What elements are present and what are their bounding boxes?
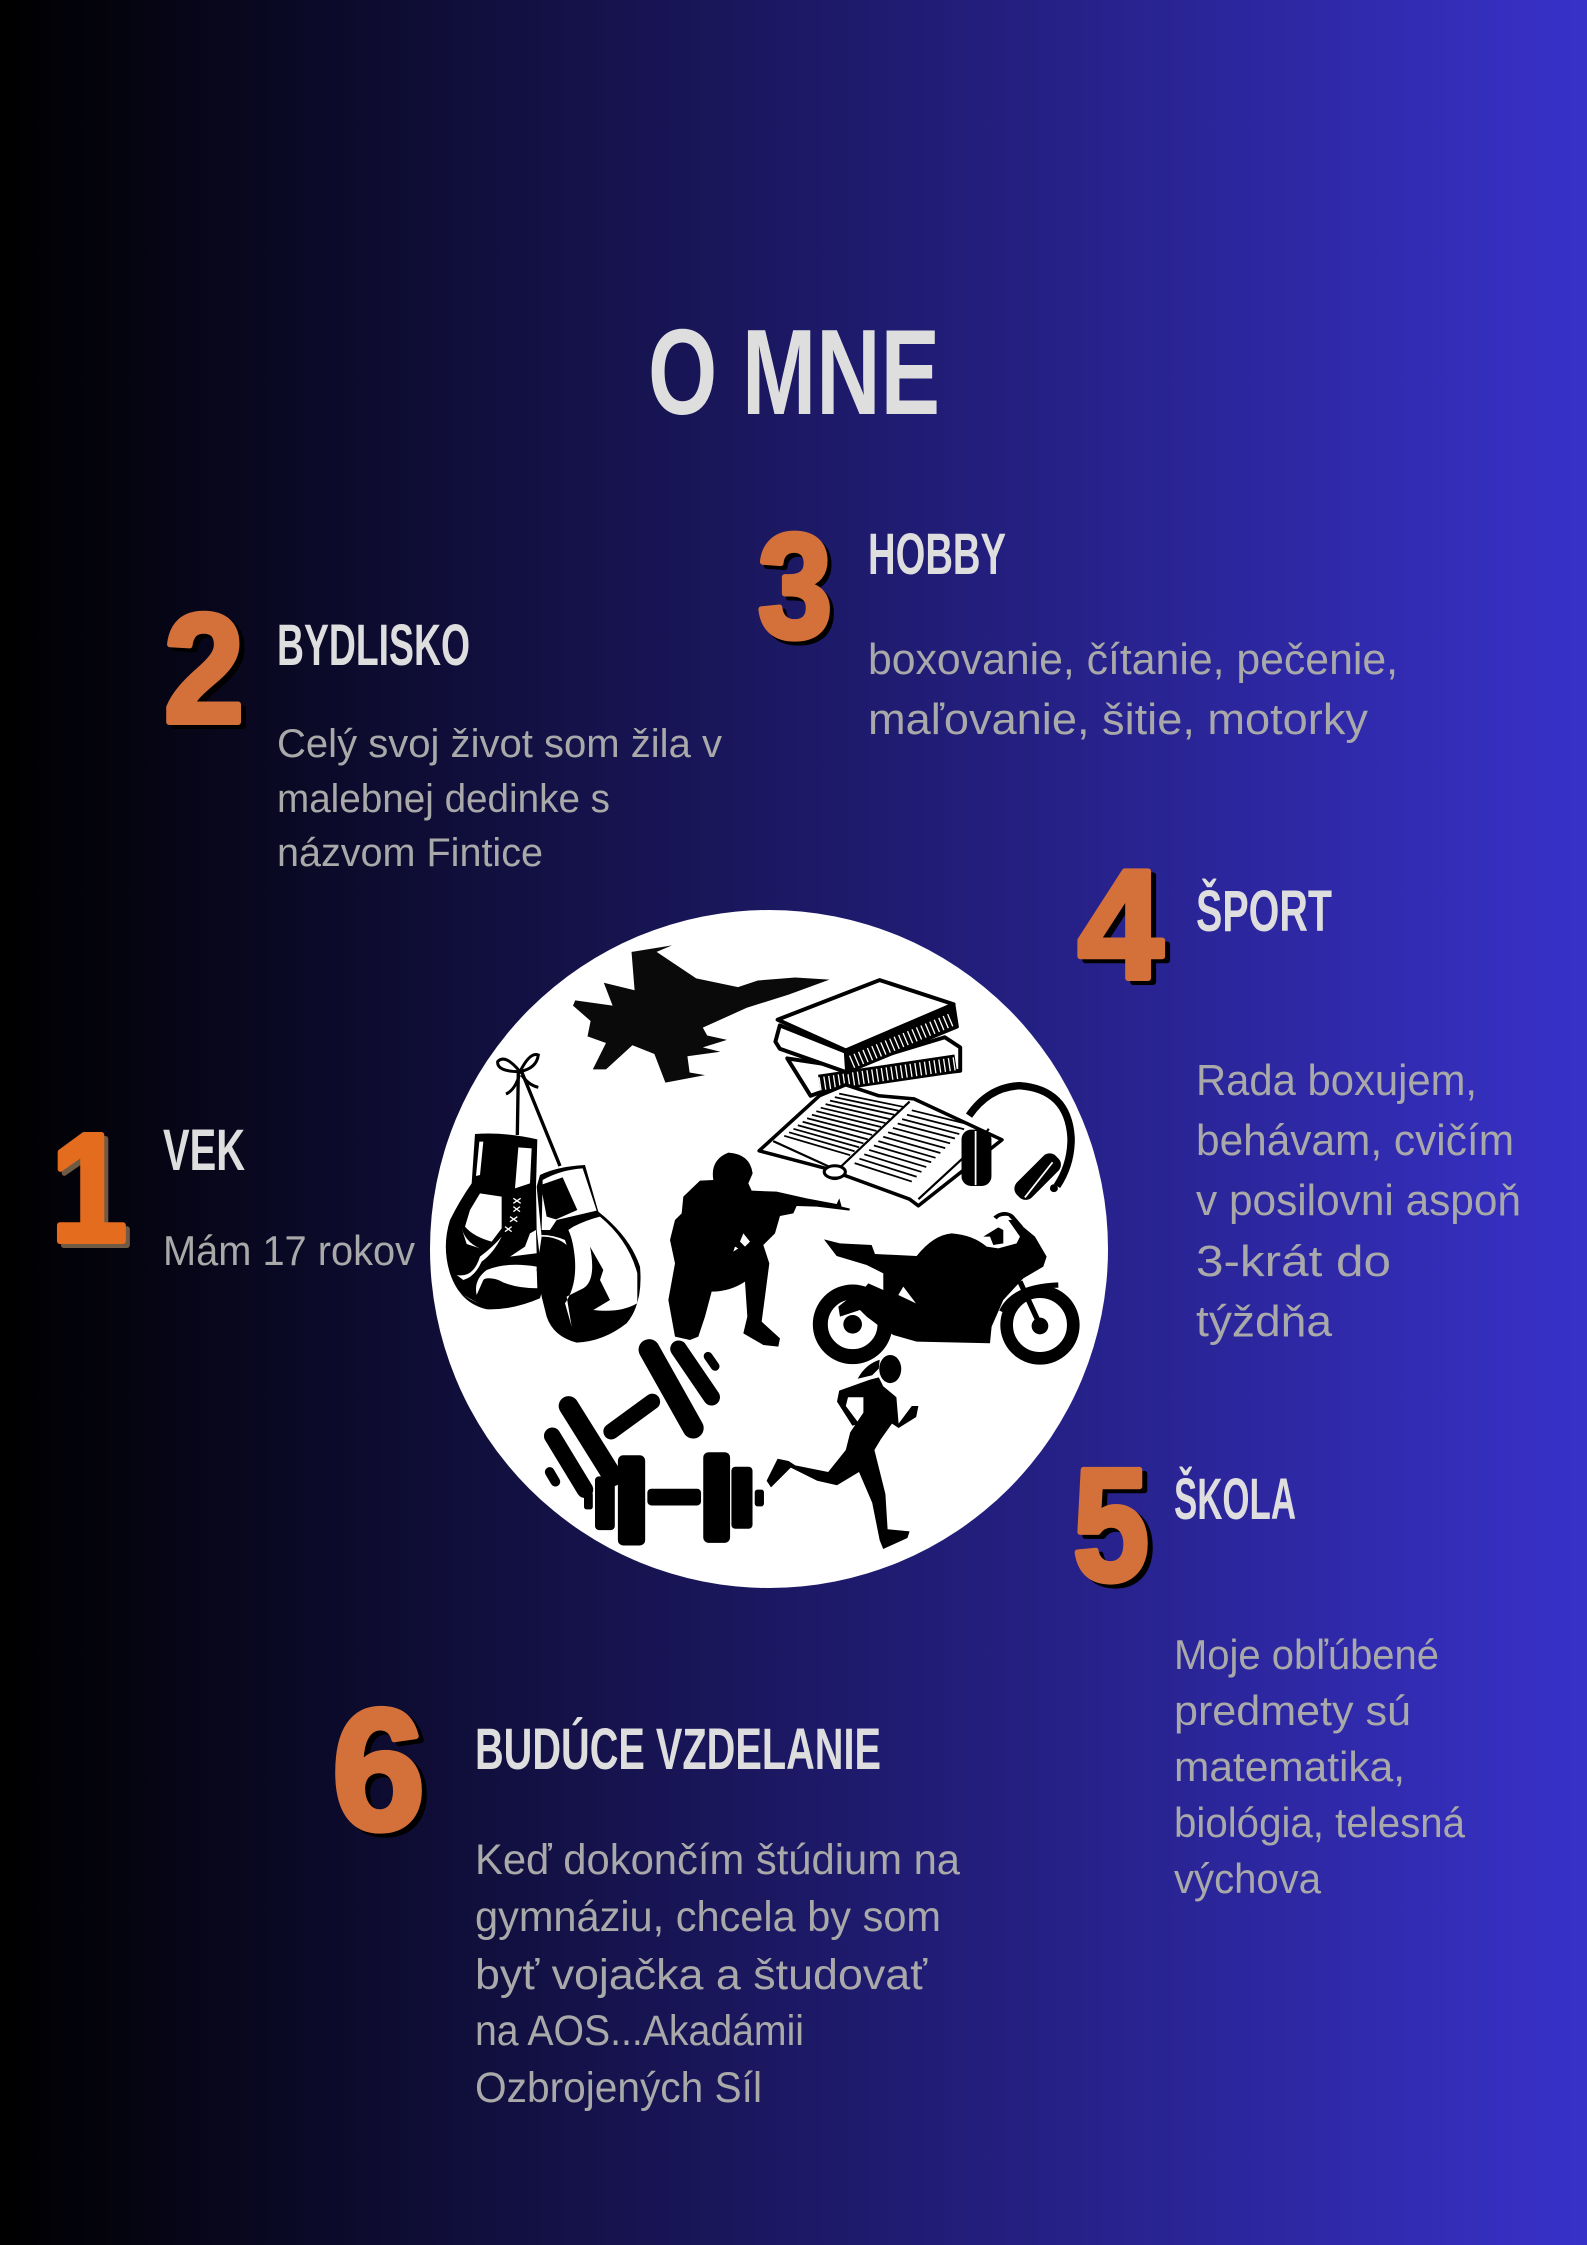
panel: central circle with icons xyxy=(430,910,1108,1588)
text: sport: týždňa xyxy=(1196,1297,1333,1346)
text: sport: behávam, cvičím xyxy=(1196,1116,1514,1165)
panel: 1 vek xyxy=(51,1102,415,1278)
icon: runner xyxy=(767,1355,918,1549)
panel: 2 bydlisko xyxy=(164,582,722,875)
text: buduce vzdelanie xyxy=(475,1836,960,2112)
number 3: 3 xyxy=(758,504,832,669)
text: bydlisko: malebnej dedinke s xyxy=(277,777,610,821)
icon: headphones xyxy=(962,1086,1071,1204)
number 3: 3 xyxy=(762,508,836,673)
text: sport: 3-krát do xyxy=(1196,1237,1391,1286)
panel: 3 hobby xyxy=(758,504,1398,744)
icon: fighter jet xyxy=(573,945,830,1083)
text: skola: predmety sú xyxy=(1174,1687,1411,1734)
text: bydlisko xyxy=(277,722,722,875)
text: skola: Moje obľúbené xyxy=(1174,1631,1439,1678)
icon: motorcycle xyxy=(820,1212,1073,1358)
text: vek: Mám 17 rokov xyxy=(163,1227,415,1274)
text: skola: biológia, telesná xyxy=(1174,1799,1466,1846)
text: hobby: boxovanie, čítanie, pečenie, xyxy=(868,635,1398,684)
icon: boxing gloves xyxy=(446,1055,641,1343)
text: buduce vzdelanie: Ozbrojených Síl xyxy=(475,2064,762,2112)
icon: open book xyxy=(759,1085,1002,1206)
icon: dumbbells xyxy=(550,1349,764,1545)
text: sport: v posilovni aspoň xyxy=(1196,1176,1521,1225)
number 6: 6 xyxy=(337,1678,430,1870)
number 4: 4 xyxy=(1078,838,1163,1011)
panel: 4 sport xyxy=(1078,838,1521,1346)
number 1: 1 xyxy=(55,1106,131,1278)
number 5: 5 xyxy=(1078,1439,1154,1618)
heading: bydlisko: BYDLISKO xyxy=(277,613,470,678)
number 2: 2 xyxy=(169,586,249,759)
text: sport: Rada boxujem, xyxy=(1196,1056,1477,1105)
title: O MNE xyxy=(648,304,940,440)
panel: 6 buduce vzdelanie xyxy=(332,1674,960,2112)
text: sport xyxy=(1196,1056,1521,1346)
number 1: 1 xyxy=(51,1102,127,1274)
text: skola: výchova xyxy=(1174,1855,1322,1902)
number 6: 6 xyxy=(332,1674,425,1866)
heading: skola: ŠKOLA xyxy=(1174,1467,1296,1532)
text: bydlisko: Celý svoj život som žila v xyxy=(277,722,722,766)
text: bydlisko: názvom Fintice xyxy=(277,831,543,875)
panel: 5 skola xyxy=(1073,1435,1466,1902)
heading: buduce vzdelanie: BUDÚCE VZDELANIE xyxy=(475,1717,881,1782)
text: skola: matematika, xyxy=(1174,1743,1405,1790)
icon: stack of books xyxy=(775,980,960,1096)
text: buduce vzdelanie: byť vojačka a študovať xyxy=(475,1951,928,1999)
heading: hobby: HOBBY xyxy=(868,522,1006,587)
text: buduce vzdelanie: na AOS...Akadámii xyxy=(475,2007,804,2055)
icon: soldier xyxy=(668,1153,850,1347)
number 2: 2 xyxy=(164,582,244,755)
heading: vek: VEK xyxy=(163,1118,245,1183)
text: hobby xyxy=(868,635,1398,744)
text: buduce vzdelanie: Keď dokončím štúdium na xyxy=(475,1836,960,1884)
heading: sport: ŠPORT xyxy=(1196,879,1332,944)
number 5: 5 xyxy=(1073,1435,1149,1614)
text: buduce vzdelanie: gymnáziu, chcela by som xyxy=(475,1893,941,1941)
text: hobby: maľovanie, šitie, motorky xyxy=(868,695,1368,744)
text: skola xyxy=(1174,1631,1466,1902)
number 4: 4 xyxy=(1083,842,1168,1015)
